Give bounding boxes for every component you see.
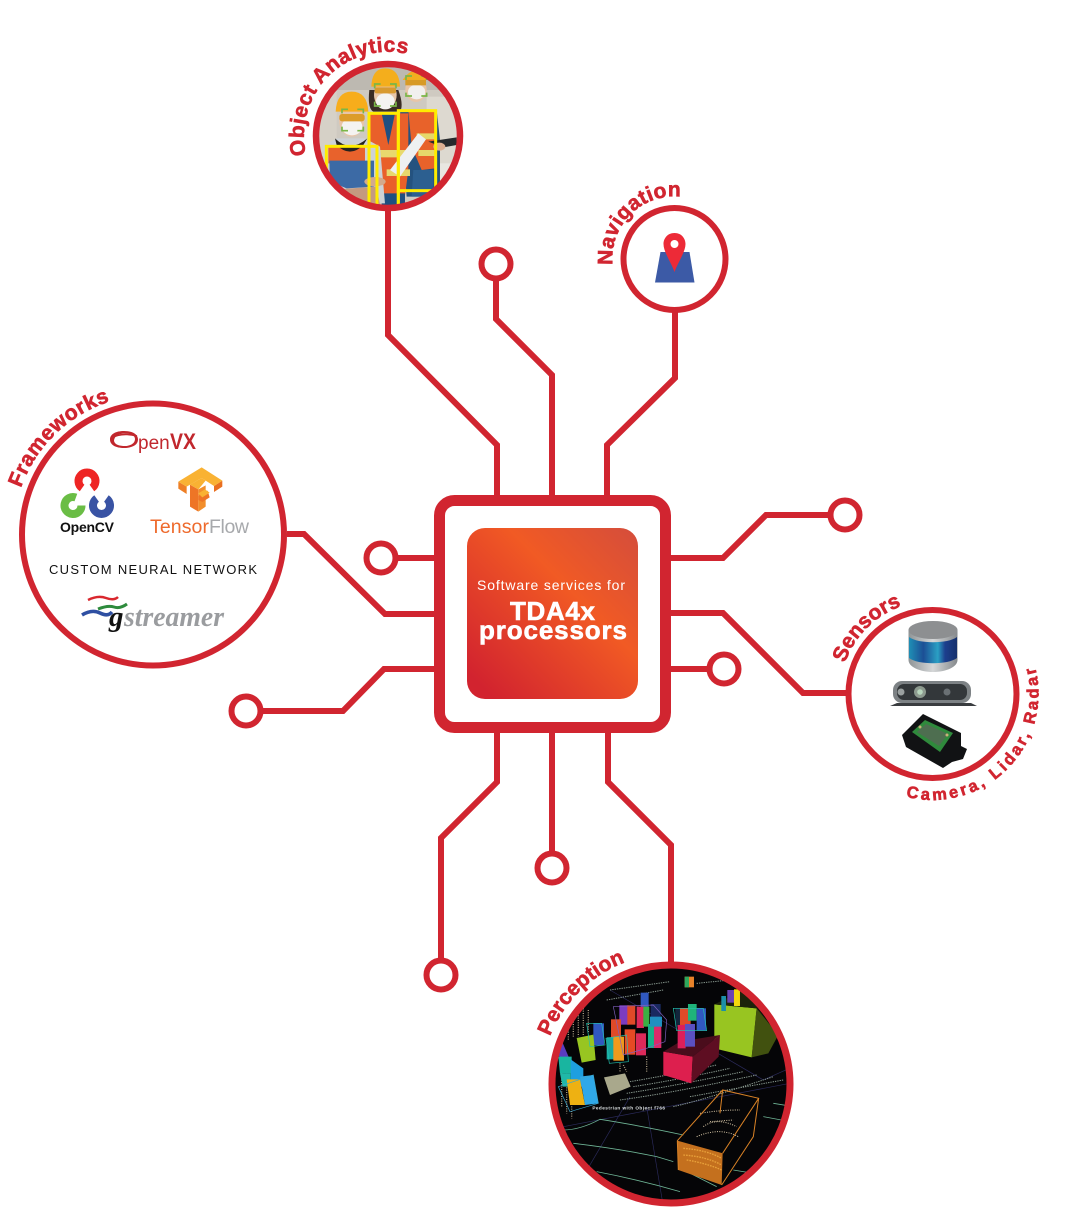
logo: OpenVX — [110, 429, 196, 454]
photo: workers with detection boxes — [319, 67, 457, 205]
terminal nodes — [232, 250, 860, 990]
panel: sensors — [833, 596, 1039, 801]
detection boxes — [326, 111, 436, 208]
logo: TensorFlow: Tensor — [150, 516, 210, 538]
logo: gstreamer: streamer — [123, 602, 225, 633]
right worker — [400, 110, 440, 197]
heading: navigation: Navigation — [598, 184, 680, 264]
red box — [663, 1035, 720, 1083]
panel: object analytics — [288, 36, 464, 212]
chip core: TDA4x — [510, 596, 596, 626]
point cloud image — [556, 968, 786, 1200]
logo: TensorFlow — [150, 467, 250, 538]
logo: OpenVX: VX — [170, 429, 196, 454]
panel: frameworks — [8, 392, 287, 668]
heading: object analytics: Object Analytics — [288, 36, 408, 156]
heading: perception: Perception — [536, 953, 624, 1036]
ring — [552, 965, 790, 1203]
text: custom neural network: CUSTOM NEURAL NETWORK — [49, 562, 257, 577]
center worker — [369, 113, 408, 203]
icon: map pin — [655, 233, 694, 282]
orange box — [677, 1090, 759, 1185]
panel: navigation — [598, 184, 728, 313]
ring — [316, 64, 460, 208]
chip core — [467, 528, 638, 699]
panel: perception — [536, 953, 794, 1206]
logo: OpenCV: OpenCV — [60, 519, 115, 535]
logo: TensorFlow: Flow — [209, 516, 250, 538]
object boxes — [557, 977, 740, 1105]
caption: camera lidar radar: Camera, Lidar, Radar — [907, 668, 1039, 801]
circuit traces — [261, 210, 846, 962]
grid lines — [563, 990, 793, 1207]
chip core: Software services for — [477, 577, 625, 593]
icon: radar module — [902, 714, 967, 768]
logo: OpenVX: pen — [138, 433, 170, 454]
icon: lidar — [908, 621, 958, 672]
label: pedestrian: Pedestrian with Object f766 — [592, 1106, 665, 1111]
heading: sensors: Sensors — [833, 596, 900, 662]
logo: gstreamer: g — [108, 601, 124, 633]
ring — [848, 610, 1016, 778]
heading: frameworks: Frameworks — [8, 392, 108, 488]
ground scan lines — [563, 1103, 793, 1192]
point clusters — [562, 1008, 647, 1118]
lime box — [714, 990, 778, 1057]
logo: gstreamer — [82, 597, 225, 633]
chip core: processors — [479, 615, 627, 645]
ring — [624, 208, 726, 310]
wireframes — [558, 1005, 707, 1112]
icon: depth camera — [890, 681, 977, 706]
front worker — [323, 138, 385, 203]
logo: OpenCV — [60, 473, 115, 535]
rolled paper and tablet — [390, 133, 426, 177]
ring — [22, 404, 284, 666]
central processor chip — [440, 500, 666, 728]
